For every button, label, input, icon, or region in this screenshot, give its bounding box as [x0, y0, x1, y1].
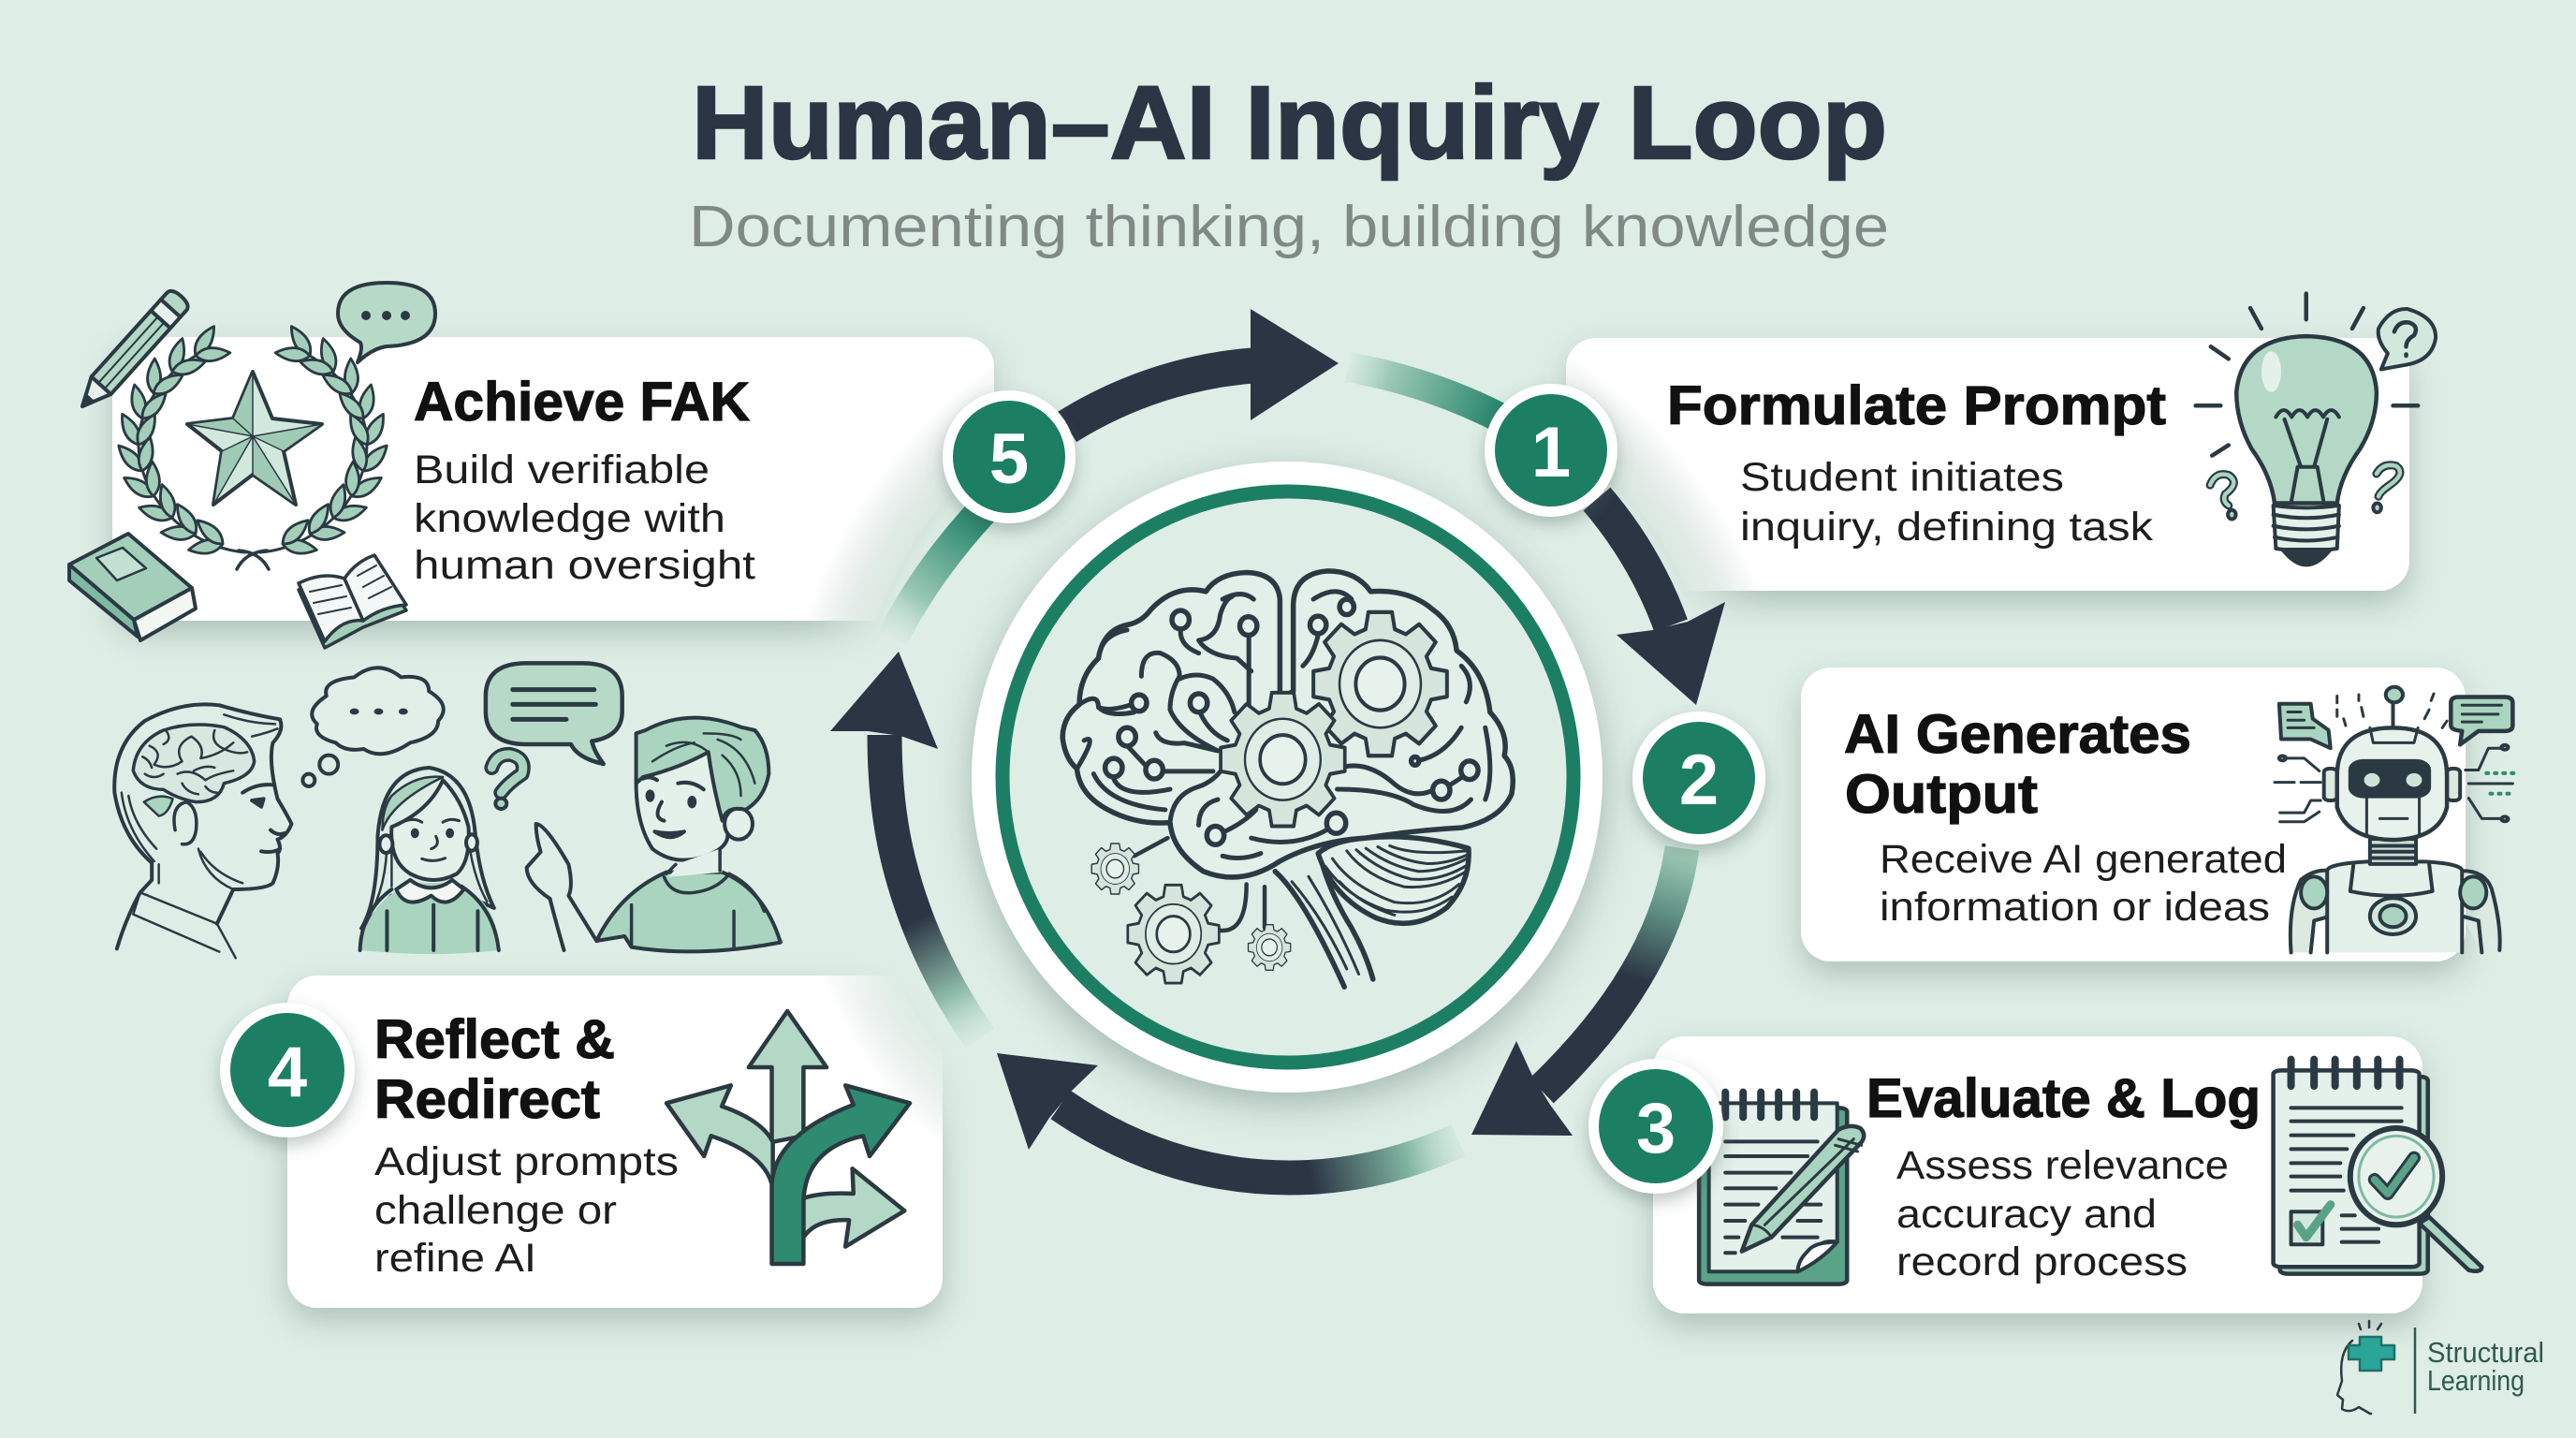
icon: robot with chat bubbles	[2275, 687, 2514, 952]
arc: fade out of step 5	[892, 510, 983, 638]
text: evaluate description: accuracy and	[1896, 1192, 2157, 1237]
icon: branching arrows	[666, 1011, 910, 1264]
heading: reflect and redirect: Redirect	[374, 1069, 600, 1130]
heading: evaluate and log: Evaluate & Log	[1866, 1068, 2261, 1129]
text: AI generates description	[1880, 837, 2287, 930]
icon: pencil	[73, 287, 191, 415]
arrow: step 2 to step 3	[1471, 848, 1682, 1136]
man with brain profile	[114, 704, 291, 958]
text: achieve FAK description	[414, 448, 755, 588]
girl	[360, 768, 499, 954]
text: reflect description: challenge or	[374, 1188, 617, 1233]
panel: step 5 achieve FAK	[69, 283, 994, 648]
badge: step 2	[1632, 712, 1765, 844]
panel: step 2 AI generates output	[1801, 668, 2514, 961]
arrow: step 4 to step 5	[830, 652, 980, 1038]
icon: light bulb with question marks	[2196, 294, 2436, 565]
badge: step 3	[1588, 1059, 1723, 1194]
text: achieve FAK description: Build verifiable	[414, 448, 710, 492]
logo icon: head with puzzle cross	[2337, 1321, 2394, 1414]
badge: step 3: 3	[1636, 1089, 1676, 1168]
text: formulate description: inquiry, defining task	[1740, 505, 2154, 550]
arrow: step 1 to step 2	[1597, 499, 1725, 705]
panel: step 4 reflect and redirect	[287, 976, 943, 1308]
text: reflect description	[374, 1139, 679, 1281]
badge: step 5: 5	[989, 419, 1029, 499]
badge: step 4: 4	[268, 1033, 307, 1112]
boy pointing	[527, 718, 781, 951]
badge: step 1: 1	[1531, 413, 1571, 492]
heading: formulate prompt: Formulate Prompt	[1667, 375, 2166, 436]
icon: notepad and pencil	[1699, 1093, 1864, 1284]
heading: reflect and redirect	[374, 1009, 615, 1130]
subtitle: Documenting thinking, building knowledge	[689, 195, 1889, 259]
panel: step 3 evaluate and log	[1653, 1036, 2481, 1313]
logo text: Learning	[2427, 1364, 2525, 1397]
text: formulate description	[1740, 455, 2154, 550]
arrow: step 3 to step 4	[997, 1053, 1458, 1178]
text: formulate description: Student initiates	[1740, 455, 2064, 500]
heading: AI generates output: AI Generates	[1844, 704, 2191, 765]
text: reflect description: refine AI	[374, 1236, 536, 1281]
text: achieve FAK description: knowledge with	[414, 496, 725, 541]
text: evaluate description: record process	[1896, 1240, 2188, 1284]
question mark	[491, 755, 523, 809]
logo: Structural Learning	[2337, 1321, 2544, 1414]
icon: open book	[299, 555, 406, 648]
badge: step 2: 2	[1679, 741, 1719, 820]
badge: step 1	[1485, 384, 1617, 517]
title: Human–AI Inquiry Loop	[692, 66, 1887, 181]
icon: brain with gears	[1062, 571, 1513, 987]
heading: AI generates output: Output	[1845, 764, 2038, 825]
illustration: people thinking and discussing	[114, 663, 781, 958]
badge: step 5	[943, 390, 1076, 523]
logo text	[2427, 1336, 2544, 1397]
text: evaluate description	[1896, 1143, 2229, 1284]
logo text: Structural	[2427, 1336, 2544, 1369]
arrow: step 5 to step 1	[1067, 309, 1339, 427]
text: AI generates description: information or ideas	[1880, 885, 2270, 930]
text: reflect description: Adjust prompts	[374, 1139, 679, 1184]
heading: AI generates output	[1844, 704, 2191, 825]
panel: step 1 formulate prompt	[1566, 294, 2436, 591]
text: achieve FAK description: human oversight	[414, 543, 755, 588]
speech bubble with lines	[486, 663, 622, 764]
heading: reflect and redirect: Reflect &	[374, 1009, 615, 1070]
text: evaluate description: Assess relevance	[1896, 1143, 2229, 1188]
heading: achieve FAK: Achieve FAK	[414, 372, 750, 433]
text: AI generates description: Receive AI generated	[1880, 837, 2287, 882]
icon: star and laurel wreath	[114, 323, 391, 569]
icon: checklist and magnifier	[2274, 1060, 2481, 1274]
badge: step 4	[220, 1003, 355, 1137]
icon: speech bubble dots	[338, 283, 435, 362]
icon: closed book	[69, 534, 196, 640]
arc: fade into step 1	[1348, 367, 1507, 421]
central circle	[972, 462, 1603, 1093]
thought cloud	[302, 668, 444, 786]
